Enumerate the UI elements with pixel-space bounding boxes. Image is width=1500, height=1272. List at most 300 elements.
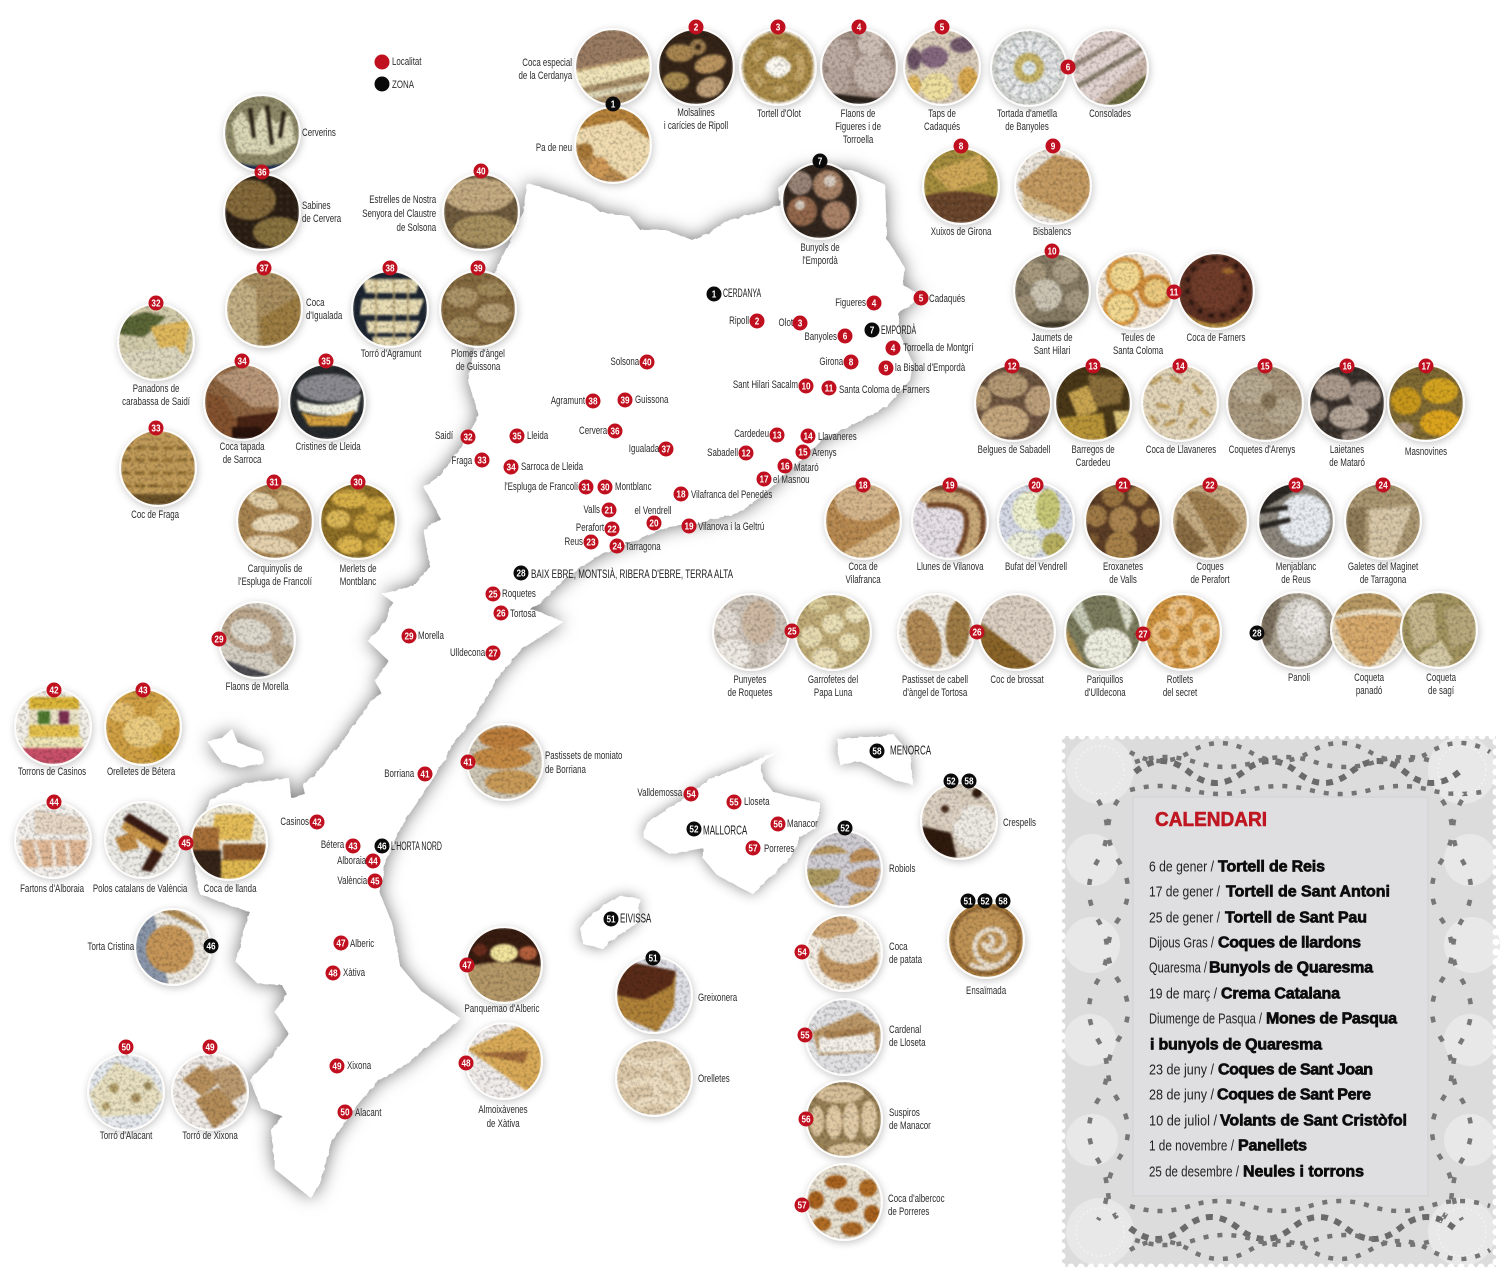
place: Valldemossa: 54	[687, 789, 696, 799]
food: Cerverins: Cerverins	[302, 127, 336, 139]
place: Montblanc: 30	[600, 482, 610, 492]
place: Agramunt: 38	[588, 396, 598, 406]
place: Sant Hilari Sacalm: Sant Hilari Sacalm	[733, 379, 798, 391]
food: Torró d'Alacant: Torró d'Alacant	[100, 1130, 153, 1142]
food: Ercavetes de Valls: de Valls	[1109, 574, 1137, 586]
calendar list: Quaresma /	[1149, 960, 1208, 976]
zone: Menorca: MENORCA	[890, 744, 932, 758]
food: Almoixàvenes de Xàtiva: 48	[461, 1058, 471, 1068]
place: Casinos: 42	[312, 817, 322, 827]
calendar list: Coques de Sant Pere	[1217, 1086, 1371, 1104]
calendar list: Panellets	[1238, 1138, 1307, 1154]
zone: Cerdanya: 1	[712, 289, 716, 299]
food: Coqueta panadó: panadó	[1356, 685, 1383, 697]
place: Reus	[565, 534, 598, 550]
food: Pastisset de cabell d'àngel de Tortosa: Pastisset de cabell	[902, 674, 968, 686]
calendar list: Coques de Sant Joan	[1218, 1062, 1373, 1078]
food: Jaumets de Sant Hilari: Jaumets de	[1032, 332, 1073, 344]
food: Tortell d'Olot	[739, 20, 817, 120]
calendar list: Tortell de Sant Pau	[1225, 910, 1367, 926]
place: la Bisbal d'Empordà: la Bisbal d'Empordà	[895, 362, 966, 374]
food: Coc de brossat: 26	[972, 627, 982, 637]
food: Masnovines	[1387, 358, 1465, 458]
food: Ensaïmada: 58	[998, 896, 1008, 906]
place: Xàtiva: Xàtiva	[343, 967, 365, 979]
food: Tortada d'ametlla de Banyoles	[990, 29, 1068, 133]
place: Sabadell: Sabadell	[707, 447, 738, 459]
place: Ulldecona	[450, 646, 500, 660]
place: Sarroca de Lleida: Sarroca de Lleida	[521, 461, 583, 473]
place: el Vendrell: 20	[649, 518, 659, 528]
place: Girona	[819, 354, 858, 370]
food: Punyetes de Roquetes: Punyetes	[734, 674, 767, 686]
calendar list: 28 de juny /	[1149, 1086, 1215, 1104]
place: Tortosa	[494, 606, 536, 620]
food: Merlets de Montblanc: Merlets de	[340, 563, 377, 575]
food: Coca de patata: de patata	[889, 954, 922, 966]
zone: Mallorca	[686, 822, 748, 838]
calendar panel background	[1133, 797, 1428, 1196]
place: Lleida: Lleida	[527, 430, 549, 442]
food: Torró d'Agramunt: 38	[385, 263, 395, 273]
food: Panadons de carabassa de Saidí: carabassa de Saidí	[122, 396, 190, 408]
food: Cardenal de Lloseta	[798, 998, 926, 1076]
food: Merlets de Montblanc	[319, 474, 397, 588]
food: Pastissets de moniato de Borriana: 41	[463, 757, 473, 767]
food: Coca d'Igualada: 37	[259, 263, 269, 273]
place: Vilafranca del Penedès: 18	[676, 489, 686, 499]
place: Torroella de Montgrí	[886, 340, 974, 356]
place: Igualada: 37	[661, 444, 671, 454]
food: Cardenal de Lloseta: 55	[800, 1030, 810, 1040]
food: Coca de patata: Coca	[889, 941, 908, 953]
place: Llavaneres: Llavaneres	[818, 431, 857, 443]
food: Laietanes de Mataró: de Mataró	[1329, 457, 1365, 469]
food: Taps de Cadaqués: 5	[940, 22, 944, 32]
food: Coca especial de la Cerdanya	[518, 28, 652, 106]
zone: Cerdanya: CERDANYA	[723, 287, 761, 301]
food: Panadons de carabassa de Saidí	[117, 296, 195, 408]
food: Ercavetes de Valls: 21	[1118, 480, 1128, 490]
calendar list: i bunyols de Quaresma	[1150, 1036, 1322, 1054]
place: Roquetes	[486, 586, 536, 602]
place: Santa Coloma de Farners: Santa Coloma de Farners	[839, 384, 930, 396]
food: Flaons de Figueres i de Torroella: Figueres i de	[835, 121, 881, 133]
place: Bétera: 43	[348, 841, 358, 851]
map: Eivissa	[580, 896, 640, 949]
place: Borriana	[384, 766, 432, 782]
food: Llunes de Vilanova: 19	[945, 480, 955, 490]
food: Suspiros de Manacor: Suspiros	[889, 1107, 920, 1119]
food: Taps de Cadaqués: Taps de	[928, 108, 956, 120]
food: Laietanes de Mataró	[1308, 358, 1386, 469]
food: Laietanes de Mataró: Laietanes	[1330, 444, 1364, 456]
food: Coqueta panadó: Coqueta	[1354, 672, 1384, 684]
place: Perafort	[576, 522, 620, 536]
doily scalloped edge	[1062, 736, 1496, 1267]
food: Cristines de Lleida: Cristines de Lleida	[296, 441, 361, 453]
place: Cervera: 36	[610, 426, 620, 436]
food: Torrons de Casinos: 42	[49, 685, 59, 695]
place: Manacor: 56	[773, 819, 783, 829]
place: Torroella de Montgrí: 4	[891, 343, 896, 353]
food: Coca de llanda: Coca de llanda	[204, 883, 257, 895]
zone: Eivissa: 51	[606, 914, 616, 924]
place: Ripoll: Ripoll	[729, 315, 749, 327]
food: Orelletes de Bétera: 43	[138, 685, 148, 695]
food: Coqueta de sagí: Coqueta	[1426, 672, 1456, 684]
place: Morella	[402, 628, 444, 644]
food: Coca tapada de Sarroca: de Sarroca	[223, 454, 262, 466]
food: Plomes d'àngel de Guissona: Plomes d'àngel	[451, 348, 505, 360]
food: Merlets de Montblanc: Montblanc	[340, 576, 376, 588]
food: Coc de brossat	[970, 593, 1056, 686]
place: Montblanc: Montblanc	[615, 481, 652, 493]
food: Almoixàvenes de Xàtiva: de Xàtiva	[487, 1118, 520, 1130]
place: Alberic: 47	[336, 938, 346, 948]
food: Coca de Vilafranca: 18	[858, 480, 868, 490]
food: Coca de Llavaneres	[1141, 358, 1219, 456]
place: Mataró: 16	[780, 461, 790, 471]
map: Racó d'Ademús enclave	[207, 729, 264, 767]
zone: Mallorca: MALLORCA	[703, 824, 748, 838]
food: Coqueta de sagí	[1400, 591, 1478, 697]
food: Bisbalencs	[1014, 138, 1092, 238]
place: Alacant: Alacant	[355, 1107, 382, 1119]
place: Sarroca de Lleida	[504, 460, 583, 474]
place: Ulldecona: Ulldecona	[450, 647, 486, 659]
calendar list: Volants de Sant Cristòfol	[1220, 1112, 1407, 1130]
food: Belgues de Sabadell: Belgues de Sabadell	[978, 444, 1050, 456]
food: Taps de Cadaqués	[903, 20, 981, 133]
place: Tortosa: Tortosa	[510, 608, 536, 620]
place: Cardedeu: 13	[772, 430, 782, 440]
place: Figueres: 4	[872, 298, 877, 308]
map labels: places	[280, 286, 974, 1120]
food: Coc de brossat: Coc de brossat	[990, 674, 1044, 686]
place: Xàtiva: 48	[328, 968, 338, 978]
place: Tortosa: 26	[496, 608, 506, 618]
place: Lleida: 35	[512, 431, 522, 441]
place: Xixona: Xixona	[347, 1060, 372, 1072]
food: Pa de neu	[536, 96, 652, 184]
food: Polos catalans de València: Polos catalans de València	[93, 883, 188, 895]
food: Carquinyolis de l'Espluga de Francolí: 31	[269, 477, 279, 487]
place: Sabadell: 12	[741, 448, 751, 458]
food: Cardenal de Lloseta: Cardenal	[889, 1024, 921, 1036]
place: Cadaqués: Cadaqués	[929, 293, 965, 305]
place: Manacor	[770, 816, 818, 832]
food: Fartons d'Alboraia	[14, 794, 92, 895]
zone: L'Horta Nord	[374, 838, 442, 854]
food: Plomes d'àngel de Guissona: de Guissona	[456, 361, 501, 373]
calendar list: Tortell de Reis	[1218, 858, 1325, 876]
place: Morella: Morella	[418, 630, 444, 642]
map: Mallorca	[643, 751, 820, 894]
place: Vilanova i la Geltrú: 19	[684, 521, 694, 531]
food: Coques de Perafort: de Perafort	[1190, 574, 1230, 586]
map: mainland Catalan-speaking territories	[193, 170, 920, 1198]
calendar list: 23 de juny /	[1149, 1062, 1215, 1078]
place: Cardedeu: Cardedeu	[734, 428, 769, 440]
place: Girona: 8	[849, 357, 853, 367]
place: Reus: Reus	[565, 536, 583, 548]
food: Xuixos de Girona	[922, 138, 1000, 238]
calendar list: Coques de llardons	[1218, 934, 1361, 952]
food: Bisbalencs: 9	[1051, 141, 1055, 151]
food: Garrofetes del Papa Luna: 25	[787, 626, 797, 636]
food: Coca de Farners	[1166, 252, 1255, 344]
food: Cristines de Lleida: 35	[321, 356, 331, 366]
zone: Cerdanya	[706, 286, 761, 302]
calendar list	[1149, 858, 1407, 1180]
place: la Bisbal d'Empordà: 9	[884, 363, 888, 373]
place: Igualada: Igualada	[629, 443, 660, 455]
food: Flaons de Figueres i de Torroella: Torroella	[843, 134, 874, 146]
food: Torrons de Casinos: Torrons de Casinos	[18, 766, 86, 778]
food: Coca de patata: 54	[798, 947, 807, 957]
food: Coca de llanda	[178, 803, 268, 895]
food: Bunyols de l'Empordà: 7	[818, 156, 822, 166]
food: Coca de llanda: 45	[181, 838, 191, 848]
food: Crespells	[920, 774, 1036, 860]
food: Torró d'Agramunt: Torró d'Agramunt	[361, 348, 421, 360]
food: Coca d'albercoc de Porreres: Coca d'albercoc	[888, 1193, 945, 1205]
food: Flaons de Morella	[212, 601, 296, 693]
food: Orelletes d'Eivissa: Orelletes	[698, 1073, 730, 1085]
place: Figueres	[835, 296, 882, 310]
zone: Empordà: EMPORDÀ	[881, 324, 916, 338]
doily lace holes	[1076, 743, 1490, 1259]
place: el Masnou: el Masnou	[773, 474, 810, 486]
food: Galetes del Maginet de Tarragona: de Tarragona	[1360, 574, 1407, 586]
place: Alboraia: Alboraia	[337, 855, 367, 867]
food: Jaumets de Sant Hilari: Sant Hilari	[1034, 345, 1070, 357]
place: Alacant: 50	[340, 1107, 350, 1117]
food: Plomes d'àngel de Guissona	[439, 260, 517, 373]
food: Rotllets del secret: Rotllets	[1167, 674, 1193, 686]
food: Consolades: 6	[1066, 62, 1070, 72]
food: Garrofetes del Papa Luna: Garrofetes del	[808, 674, 858, 686]
food: Belgues de Sabadell: 12	[1007, 361, 1017, 371]
calendar list: 10 de juliol /	[1149, 1112, 1218, 1130]
zone: Mallorca: 52	[689, 824, 699, 834]
food: Barregos de Cardedeu	[1054, 358, 1132, 469]
food: Menjablanc de Reus	[1257, 478, 1335, 586]
food: Galetes del Maginet de Tarragona	[1344, 478, 1422, 586]
legend: ZONA	[392, 79, 414, 91]
zone: Eivissa: EIVISSA	[620, 912, 652, 926]
place: Sarroca de Lleida: 34	[507, 462, 516, 472]
place: Borriana: Borriana	[384, 768, 415, 780]
zone: Menorca: 58	[872, 746, 882, 756]
food: Masnovines: Masnovines	[1405, 446, 1447, 458]
place: Xàtiva	[326, 966, 365, 980]
legend: Localitat	[392, 56, 422, 68]
place: Cadaqués: 5	[919, 293, 923, 303]
calendar list: Neules i torrons	[1243, 1164, 1364, 1180]
food: Laietanes de Mataró: 16	[1342, 361, 1352, 371]
food: Estrelles de Nostra Senyora del Claustre de Solsona: 40	[476, 166, 486, 176]
place: València: 45	[370, 876, 380, 886]
food: Coca d'albercoc de Porreres: de Porreres	[888, 1206, 929, 1218]
calendar list: 6 de gener /	[1149, 858, 1215, 876]
food: Taps de Cadaqués: Cadaqués	[924, 121, 960, 133]
place: Bétera	[321, 838, 360, 854]
place: Igualada	[629, 442, 674, 456]
food: Greixonera: 51	[648, 953, 658, 963]
place: Roquetes: 25	[488, 589, 498, 599]
food: Consolades: Consolades	[1089, 108, 1131, 120]
food: Sabines de Cervera: 36	[257, 167, 267, 177]
food: Almoixàvenes de Xàtiva	[458, 1022, 543, 1130]
place: Tarragona	[610, 538, 661, 554]
place: València: València	[337, 875, 368, 887]
calendar list: 25 de gener /	[1149, 910, 1221, 926]
place: Santa Coloma de Farners	[822, 380, 930, 396]
place: Saidí	[435, 430, 476, 444]
place: Manacor: Manacor	[787, 818, 818, 830]
zone: Baix Ebre: BAIX EBRE, MONTSIÀ, RIBERA D'EBRE, TERRA ALTA	[531, 566, 733, 581]
food: Flaons de Figueres i de Torroella: Flaons de	[841, 108, 876, 120]
food: Torró d'Agramunt	[351, 260, 429, 360]
zone: Empordà: 7	[870, 325, 874, 335]
food: Coca d'albercoc de Porreres	[794, 1163, 945, 1241]
place: Olot	[779, 316, 808, 330]
calendar list: Crema Catalana	[1221, 986, 1340, 1002]
food: Coc de Fraga	[119, 420, 197, 521]
place: Agramunt: Agramunt	[551, 395, 585, 407]
place: Borriana: 41	[420, 769, 430, 779]
place: el Masnou	[756, 472, 810, 486]
food: Crespells: Crespells	[1003, 817, 1036, 829]
place: Lleida	[510, 428, 549, 444]
food: Bufat del Vendrell	[997, 478, 1075, 573]
place: Llavaneres: 14	[804, 431, 813, 441]
place: Agramunt	[551, 394, 600, 408]
food: Suspiros de Manacor: de Manacor	[889, 1120, 931, 1132]
place: Guissona: 39	[620, 395, 630, 405]
food: Flaons de Figueres i de Torroella: 4	[857, 22, 862, 32]
place: Banyoles: 6	[843, 331, 847, 341]
place: Torroella de Montgrí: Torroella de Montgrí	[903, 342, 974, 354]
place: Valldemossa	[637, 786, 698, 802]
food: Suspiros de Manacor: 56	[801, 1114, 811, 1124]
place: el Vendrell: el Vendrell	[635, 505, 671, 517]
place: Lloseta: Lloseta	[744, 796, 770, 808]
food: Torta Cristina	[88, 908, 218, 986]
place: Saidí: 32	[463, 432, 473, 442]
food: Bunyols de l'Empordà: Bunyols de	[800, 242, 840, 254]
food: Torta Cristina: 46	[206, 941, 216, 951]
food: Pastisset de cabell d'àngel de Tortosa: d'àngel de Tortosa	[903, 687, 968, 699]
food: Merlets de Montblanc: 30	[353, 477, 363, 487]
place: Valls: Valls	[583, 504, 600, 516]
food: Llunes de Vilanova	[911, 478, 989, 573]
place: Mataró	[778, 458, 819, 474]
place: Porreres: 57	[748, 843, 758, 853]
food: Tortell d'Olot: 3	[776, 22, 780, 32]
food: Flaons de Morella: Flaons de Morella	[226, 681, 289, 693]
zone: Baix Ebre: 28	[516, 568, 526, 578]
place: Perafort: Perafort	[576, 522, 604, 534]
food: Coca tapada de Sarroca	[203, 354, 281, 466]
place: Fraga	[451, 452, 490, 468]
place: Tarragona: 24	[613, 541, 622, 551]
place: Ripoll	[729, 314, 764, 328]
food: Crespells: 58	[964, 776, 974, 786]
place: Arenys	[796, 444, 837, 460]
place: Sabadell	[707, 446, 754, 460]
legend	[374, 54, 422, 92]
place: Olot: Olot	[779, 317, 793, 329]
doily paper	[1062, 736, 1496, 1267]
food: Greixonera	[615, 950, 738, 1034]
food: Carquinyolis de l'Espluga de Francolí: Carquinyolis de	[248, 563, 303, 575]
food: Ensaïmada: 51	[963, 896, 973, 906]
place: Alboraia: 44	[369, 856, 378, 866]
place: Solsona: Solsona	[611, 356, 640, 368]
food: Suspiros de Manacor	[798, 1080, 931, 1158]
food: Flaons de Morella: 29	[214, 634, 224, 644]
place: Alberic: Alberic	[350, 938, 374, 950]
food: Coques de Perafort: 22	[1205, 480, 1215, 490]
food: Masnovines: 17	[1421, 361, 1431, 371]
food: Menjablanc de Reus: de Reus	[1281, 574, 1311, 586]
food: Pastissets de moniato de Borriana: de Borriana	[545, 764, 586, 776]
food: Coca de patata	[794, 914, 922, 992]
panel: calendar doily	[1062, 736, 1500, 1267]
food: Tortada d'ametlla de Banyoles: de Banyoles	[1005, 121, 1049, 133]
food: Estrelles de Nostra Senyora del Claustre de Solsona	[362, 164, 520, 251]
calendar list: Mones de Pasqua	[1266, 1010, 1397, 1028]
food: Molsalines i carícies de Ripoll: 2	[694, 22, 698, 32]
place: el Masnou: 17	[759, 474, 769, 484]
food: Teules de Santa Coloma: Santa Coloma	[1113, 345, 1164, 357]
food: Estrelles de Nostra Senyora del Claustre de Solsona: Senyora del Claustre	[362, 208, 437, 220]
food: Coca d'albercoc de Porreres: 57	[797, 1200, 807, 1210]
map: Menorca	[837, 734, 913, 785]
place: l'Espluga de Francolí: l'Espluga de Francolí	[504, 481, 578, 493]
place: Xixona: 49	[332, 1061, 342, 1071]
calendar list: 19 de març /	[1149, 986, 1218, 1002]
food: Molsalines i carícies de Ripoll: Molsalines	[677, 107, 715, 119]
place: Figueres: Figueres	[835, 297, 866, 309]
food: Torró de Xixona: Torró de Xixona	[182, 1130, 238, 1142]
place: Saidí: Saidí	[435, 430, 453, 442]
food: Torta Cristina: Torta Cristina	[88, 941, 135, 953]
food: Rotllets del secret	[1136, 593, 1222, 699]
place: Guissona: Guissona	[635, 394, 669, 406]
food: Pariquillos d'Ulldecona: Pariquillos	[1087, 674, 1123, 686]
food: Ercavetes de Valls	[1084, 478, 1162, 586]
place: Valldemossa: Valldemossa	[637, 787, 683, 799]
place: Porreres	[746, 840, 794, 856]
food: Pastisset de cabell d'àngel de Tortosa	[897, 593, 975, 699]
zone: Baix Ebre	[514, 566, 733, 581]
place: València	[337, 874, 382, 888]
food: Panquemao d'Alberic	[460, 926, 543, 1015]
food: Ensaïmada: Ensaïmada	[966, 985, 1007, 997]
place: Porreres: Porreres	[764, 843, 794, 855]
food: Coques de Perafort	[1171, 478, 1249, 586]
food: Xuixos de Girona: 8	[959, 141, 963, 151]
place: Ripoll: 2	[755, 316, 759, 326]
place: Cardedeu	[734, 428, 784, 442]
food: Ensaïmada	[947, 894, 1025, 997]
food: Garrofetes del Papa Luna: Papa Luna	[814, 687, 853, 699]
food: Coques de Perafort: Coques	[1196, 561, 1224, 573]
